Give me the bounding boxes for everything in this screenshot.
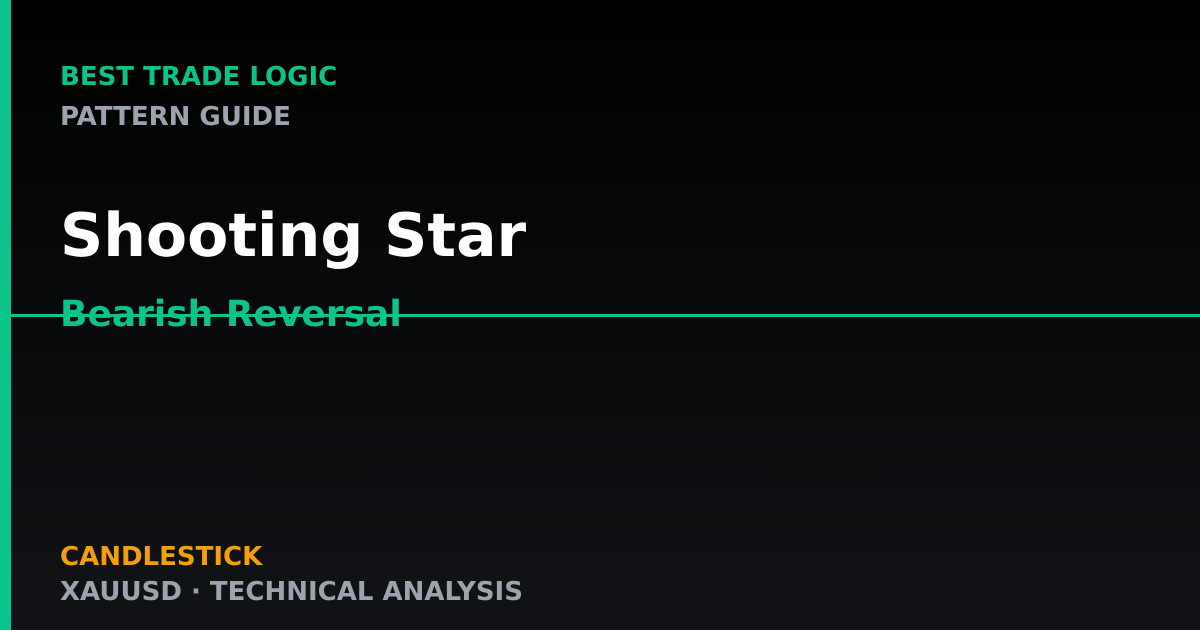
guide label: PATTERN GUIDE: [60, 102, 291, 132]
instrument label: XAUUSD · TECHNICAL ANALYSIS: [60, 577, 523, 607]
title: Shooting Star: [60, 201, 527, 271]
horizontal accent line: [11, 314, 1200, 317]
brand label: BEST TRADE LOGIC: [60, 62, 337, 92]
category label: CANDLESTICK: [60, 542, 263, 572]
left accent bar: [0, 0, 11, 630]
subtitle: Bearish Reversal: [60, 294, 402, 335]
